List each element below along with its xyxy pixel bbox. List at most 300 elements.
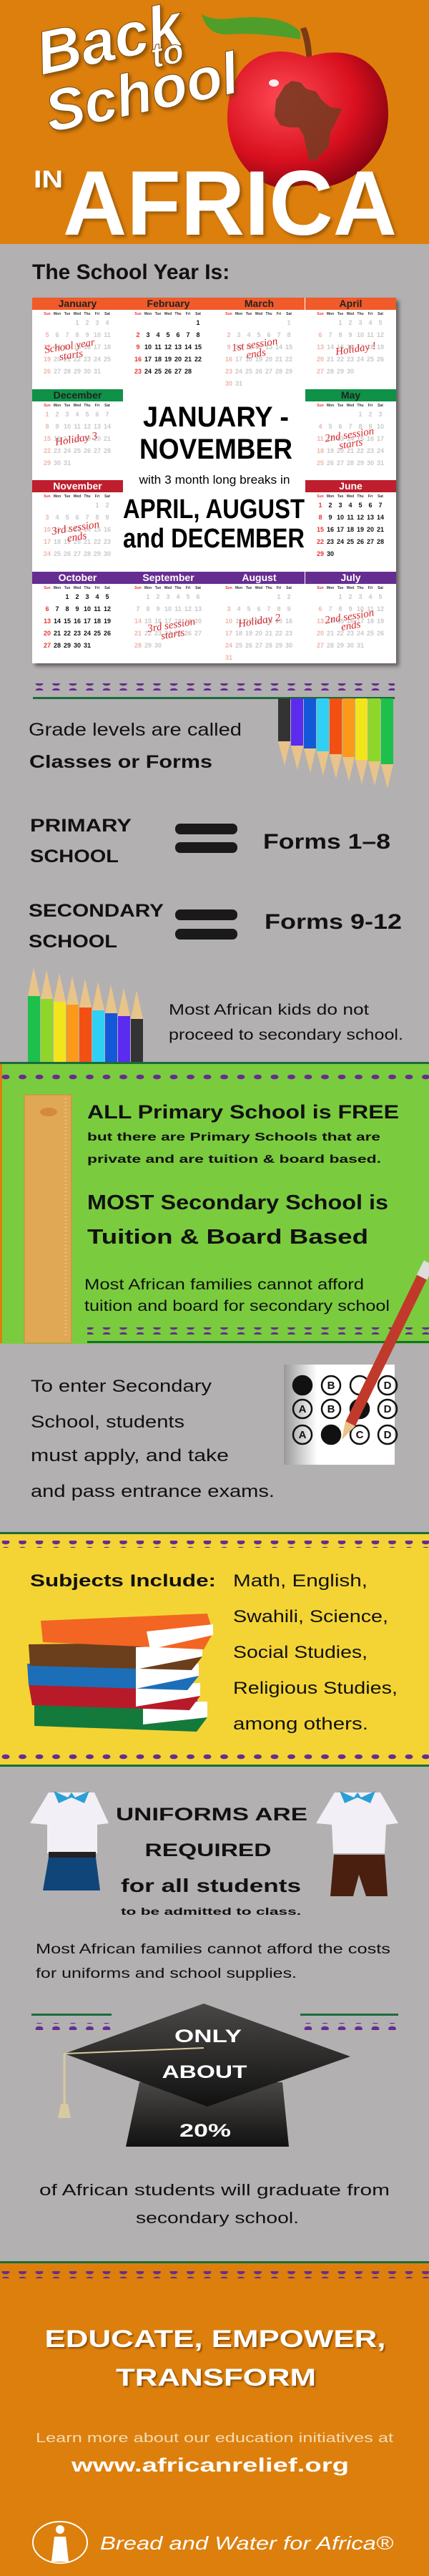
calendar: October: 11 — [94, 605, 101, 613]
calendar: April: 10 — [357, 331, 364, 338]
calendar: September: 12 — [184, 605, 192, 613]
calendar: April: 15 — [337, 343, 344, 351]
calendar: September: 24 — [164, 630, 172, 637]
text: secondary school — [29, 901, 164, 952]
annotation: 3rd session starts: 3rd session — [147, 616, 196, 635]
calendar: October: 13 — [44, 618, 51, 625]
calendar: July — [305, 572, 396, 649]
annotation: 2nd session ends: ends — [340, 619, 362, 633]
calendar: March: 18 — [245, 356, 252, 363]
calendar: July: 20 — [317, 630, 324, 637]
calendar: November: 10 — [44, 526, 51, 533]
calendar: June: 21 — [377, 526, 384, 533]
calendar: June: 27 — [367, 538, 374, 545]
calendar: January: 5 — [45, 331, 49, 338]
calendar: June — [305, 480, 396, 557]
list: subjects: Religious Studies, — [233, 1679, 398, 1698]
title: Back to School: to — [147, 31, 187, 76]
calendar: January: 29 — [74, 368, 81, 375]
calendar: November: 11 — [54, 526, 61, 533]
calendar: August: Fri — [277, 586, 281, 590]
calendar: October — [32, 572, 123, 649]
panel: tuition (green band) — [0, 1062, 429, 1344]
calendar: June: 13 — [367, 514, 374, 521]
calendar: January: Sat — [104, 312, 110, 316]
list: subjects: Math, English, — [233, 1571, 368, 1591]
icon: exam answer sheet: B — [327, 1403, 335, 1415]
calendar: September: 20 — [194, 618, 202, 625]
text: entrance exams: To enter Secondary — [31, 1377, 212, 1396]
calendar: July: 8 — [338, 605, 342, 613]
calendar: December: 3 — [65, 411, 69, 418]
calendar: December — [32, 389, 123, 467]
callout: school year range: JANUARY - — [143, 401, 289, 433]
calendar: February: 11 — [154, 343, 162, 351]
callout: school year range: with 3 month long breaks in — [138, 473, 290, 487]
calendar: September: 25 — [174, 630, 182, 637]
calendar: May: 31 — [377, 459, 384, 467]
calendar: April: 28 — [327, 368, 334, 375]
calendar: August: Thu — [265, 586, 272, 590]
callout: school year range — [123, 401, 305, 554]
calendar: January: 11 — [104, 331, 111, 338]
heading: subjects include: Subjects Include: — [30, 1571, 216, 1591]
calendar: July: 6 — [318, 605, 322, 613]
calendar: July: 25 — [367, 630, 374, 637]
calendar: January: 28 — [64, 368, 71, 375]
calendar: September: 1 — [146, 593, 150, 600]
calendar: November: 22 — [94, 538, 101, 545]
calendar: July: Fri — [368, 586, 373, 590]
title: Back to School — [30, 0, 245, 145]
calendar: January: 12 — [44, 343, 51, 351]
calendar: March: Sun — [225, 312, 232, 316]
calendar: January: 10 — [94, 331, 101, 338]
calendar: September: September — [142, 572, 194, 583]
calendar: April: 9 — [348, 331, 352, 338]
calendar: August: 4 — [237, 605, 240, 613]
calendar: October: 2 — [75, 593, 79, 600]
calendar: January: Mon — [54, 312, 61, 316]
main body graphics — [0, 683, 429, 2576]
calendar: May: Mon — [327, 404, 334, 408]
calendar: June: 17 — [337, 526, 344, 533]
calendar: September: 8 — [146, 605, 150, 613]
calendar: June: 18 — [347, 526, 354, 533]
calendar: March: 22 — [285, 356, 292, 363]
calendar: August: 9 — [287, 605, 290, 613]
calendar: May: 9 — [368, 423, 372, 430]
calendar: December: 14 — [104, 423, 111, 430]
annotation: 3rd session ends: ends — [66, 530, 87, 545]
calendar: July: 17 — [357, 618, 364, 625]
calendar: February: Tue — [155, 312, 161, 316]
calendar: September: Sun — [134, 586, 142, 590]
icon: exam answer sheet: D — [384, 1403, 392, 1415]
calendar: December: 13 — [94, 423, 101, 430]
calendar: January: Tue — [64, 312, 70, 316]
calendar: July: 22 — [337, 630, 344, 637]
calendar: June: 14 — [377, 514, 384, 521]
calendar: May: 27 — [337, 459, 344, 467]
calendar: March: 13 — [265, 343, 272, 351]
calendar: July: 28 — [327, 642, 334, 649]
calendar: June: 29 — [317, 550, 324, 557]
calendar: July: 7 — [328, 605, 332, 613]
calendar: July: Sat — [378, 586, 383, 590]
text: graduation statistic: secondary school. — [136, 2209, 299, 2227]
calendar: April: 29 — [337, 368, 344, 375]
calendar: May: Thu — [357, 404, 364, 408]
calendar: August: 17 — [225, 630, 232, 637]
calendar: July: 10 — [357, 605, 364, 613]
calendar: June: 4 — [348, 502, 352, 509]
calendar: September: 28 — [134, 642, 142, 649]
calendar: June: 20 — [367, 526, 374, 533]
calendar: February: 25 — [154, 368, 162, 375]
calendar: May: 6 — [338, 423, 342, 430]
calendar: April: Sat — [378, 312, 383, 316]
calendar: August: 14 — [265, 618, 272, 625]
annotation: 3rd session starts: starts — [160, 627, 185, 642]
calendar: November: 27 — [74, 550, 81, 557]
calendar: December: 26 — [84, 447, 91, 454]
panel: subjects (yellow band) — [0, 1532, 429, 1767]
icon: exam answer sheet: A — [299, 1429, 307, 1441]
calendar: June: Mon — [327, 494, 334, 499]
text: all primary school is free: but there are Primary Schools that are — [87, 1131, 380, 1143]
calendar: April: 14 — [327, 343, 334, 351]
calendar: December: 29 — [44, 459, 51, 467]
annotation: 1st session ends: 1st session — [231, 336, 278, 354]
calendar: March: 30 — [225, 380, 232, 387]
calendar: January: 17 — [94, 343, 101, 351]
text: families cannot afford tuition: tuition and board for secondary school — [84, 1298, 390, 1314]
calendar: May: 21 — [347, 447, 354, 454]
text: graduation statistic: of African students will graduate from — [39, 2181, 390, 2199]
calendar: February: 7 — [186, 331, 190, 338]
calendar: April: April — [340, 298, 362, 309]
calendar: April — [305, 298, 396, 375]
text: forms 9-12: Forms 9-12 — [265, 910, 402, 934]
calendar: January: 25 — [104, 356, 111, 363]
calendar: November — [32, 480, 123, 557]
icon: exam answer sheet: D — [384, 1380, 392, 1392]
calendar: June: 9 — [328, 514, 332, 521]
calendar: May: 30 — [367, 459, 374, 467]
calendar: November: Fri — [95, 494, 99, 499]
text: all primary school is free: ALL Primary School is FREE — [87, 1101, 399, 1123]
calendar: May: 12 — [327, 435, 334, 442]
calendar: October: 29 — [64, 642, 71, 649]
calendar: April: 22 — [337, 356, 344, 363]
calendar: May: 17 — [377, 435, 384, 442]
calendar: March: 14 — [275, 343, 282, 351]
calendar: May: Tue — [337, 404, 343, 408]
calendar: November: 3 — [45, 514, 49, 521]
calendar: November: 12 — [64, 526, 71, 533]
calendar: September: 18 — [174, 618, 182, 625]
calendar: December: 15 — [44, 435, 51, 442]
list: subjects: among others. — [233, 1714, 368, 1734]
calendar: April: 24 — [357, 356, 364, 363]
list: subjects: Social Studies, — [233, 1643, 368, 1662]
calendar: June: 23 — [327, 538, 334, 545]
calendar: January: 27 — [54, 368, 61, 375]
calendar: August: 6 — [257, 605, 260, 613]
annotation: 2nd session starts: starts — [338, 436, 363, 452]
calendar: December: 5 — [85, 411, 89, 418]
calendar: August: 21 — [265, 630, 272, 637]
calendar: June: 16 — [327, 526, 334, 533]
calendar: May: 8 — [358, 423, 362, 430]
heading: educate empower transform: TRANSFORM — [116, 2364, 316, 2391]
calendar: October: 10 — [84, 605, 91, 613]
calendar: June: Fri — [368, 494, 373, 499]
calendar: January — [32, 298, 123, 375]
calendar: October: 14 — [54, 618, 61, 625]
calendar: March: 6 — [267, 331, 270, 338]
calendar: June: 12 — [357, 514, 364, 521]
calendar: January: 9 — [85, 331, 89, 338]
calendar: December: 11 — [74, 423, 81, 430]
icon: uniform with skirt — [30, 1791, 109, 1890]
calendar: October: Sun — [44, 586, 51, 590]
calendar: September: 16 — [154, 618, 162, 625]
calendar: October: 1 — [65, 593, 69, 600]
calendar: August: 28 — [265, 642, 272, 649]
calendar: March: Fri — [277, 312, 281, 316]
text: all primary school is free: private and are tuition & board based. — [87, 1153, 381, 1166]
calendar: September: Wed — [164, 586, 172, 590]
calendar: May: 3 — [378, 411, 382, 418]
calendar: October: 19 — [104, 618, 111, 625]
calendar: August: 3 — [227, 605, 230, 613]
calendar: April: 21 — [327, 356, 334, 363]
calendar: July: Mon — [327, 586, 334, 590]
calendar: July: 1 — [338, 593, 342, 600]
calendar: April: 5 — [378, 319, 382, 326]
calendar: June: 10 — [337, 514, 344, 521]
callout: school year range: NOVEMBER — [139, 434, 292, 465]
calendar: August: 7 — [267, 605, 270, 613]
calendar: December: 6 — [95, 411, 99, 418]
calendar: March: 9 — [227, 343, 230, 351]
calendar: June: 8 — [318, 514, 322, 521]
calendar: February: 13 — [174, 343, 182, 351]
calendar: March: 11 — [245, 343, 252, 351]
calendar: January: Thu — [84, 312, 91, 316]
calendar: November: 5 — [65, 514, 69, 521]
calendar: March: 28 — [275, 368, 282, 375]
calendar: May: 13 — [337, 435, 344, 442]
calendar: June: 30 — [327, 550, 334, 557]
divider: dots — [33, 683, 395, 691]
text: grade levels — [29, 720, 242, 772]
calendar: February: 26 — [164, 368, 172, 375]
calendar: February: Wed — [164, 312, 172, 316]
text: uniforms required: for all students — [121, 1875, 301, 1896]
icon: exam answer sheet: A — [299, 1403, 307, 1415]
calendar: August: 8 — [277, 605, 280, 613]
calendar: November: 4 — [55, 514, 59, 521]
calendar: November: 18 — [54, 538, 61, 545]
calendar: November: 20 — [74, 538, 81, 545]
calendar: March — [214, 298, 305, 387]
calendar: May: 28 — [347, 459, 354, 467]
calendar: August: August — [242, 572, 277, 583]
text: entrance exams: School, students — [31, 1413, 184, 1432]
calendar: July: 26 — [377, 630, 384, 637]
calendar: May: Wed — [347, 404, 354, 408]
calendar: February: 2 — [136, 331, 140, 338]
icon: exam answer sheet: D — [384, 1429, 392, 1441]
calendar: January: 3 — [95, 319, 99, 326]
calendar: October: 18 — [94, 618, 101, 625]
annotation: school year starts: School year — [44, 337, 96, 356]
calendar: September: 14 — [134, 618, 142, 625]
calendar: January: 24 — [94, 356, 101, 363]
text: most secondary is tuition: Tuition & Board Based — [87, 1226, 368, 1249]
heading: educate empower transform: EDUCATE, EMPOWER, — [44, 2326, 386, 2353]
calendar: October: 24 — [84, 630, 91, 637]
icon: graduation cap with statistic: ABOUT — [162, 2062, 247, 2082]
list: subjects — [233, 1571, 398, 1734]
calendar: April: 8 — [338, 331, 342, 338]
calendar: November: 24 — [44, 550, 51, 557]
calendar: January: 15 — [74, 343, 81, 351]
calendar: May: 7 — [348, 423, 352, 430]
calendar: October: 6 — [45, 605, 49, 613]
calendar: August: 2 — [287, 593, 290, 600]
calendar: June: Sun — [317, 494, 324, 499]
annotation: 1st session ends: ends — [245, 347, 267, 361]
calendar: August: 29 — [275, 642, 282, 649]
calendar: November: 13 — [74, 526, 81, 533]
calendar: January: 20 — [54, 356, 61, 363]
calendar: May: 4 — [318, 423, 322, 430]
calendar: June: 19 — [357, 526, 364, 533]
calendar: February: 22 — [194, 356, 202, 363]
calendar: May: 24 — [377, 447, 384, 454]
annotation: holiday 3: Holiday 3 — [54, 430, 98, 449]
calendar: February: 12 — [164, 343, 172, 351]
calendar: December: 23 — [54, 447, 61, 454]
calendar: November: 29 — [94, 550, 101, 557]
calendar: February: Sat — [195, 312, 201, 316]
calendar: February: Thu — [174, 312, 182, 316]
calendar: May — [305, 389, 396, 467]
calendar: August: 11 — [235, 618, 242, 625]
calendar: September: 9 — [156, 605, 160, 613]
calendar: December: 21 — [104, 435, 111, 442]
calendar: April: 30 — [347, 368, 354, 375]
calendar: April: Mon — [327, 312, 334, 316]
calendar: July: 18 — [367, 618, 374, 625]
calendar: January: 16 — [84, 343, 91, 351]
calendar: June: 26 — [357, 538, 364, 545]
calendar: February: 15 — [194, 343, 202, 351]
calendar: April: 16 — [347, 343, 354, 351]
calendar: August: 18 — [235, 630, 242, 637]
calendar: July: 4 — [368, 593, 372, 600]
calendar: January: 30 — [84, 368, 91, 375]
calendar: August: Wed — [255, 586, 262, 590]
calendar: November: 30 — [104, 550, 111, 557]
calendar: May: Sun — [317, 404, 324, 408]
calendar: December: 4 — [75, 411, 79, 418]
text: primary school: PRIMARY — [30, 816, 132, 836]
icon: graduation cap with statistic: ONLY — [174, 2026, 242, 2046]
calendar: April: 6 — [318, 331, 322, 338]
icon: pencils pointing up — [28, 967, 143, 1063]
calendar: May: 26 — [327, 459, 334, 467]
calendar: June: 2 — [328, 502, 332, 509]
calendar: February: 20 — [174, 356, 182, 363]
calendar: December: Sat — [104, 404, 110, 408]
calendar: July: 13 — [317, 618, 324, 625]
calendar: March: March — [245, 298, 274, 309]
text: families cannot afford tuition — [84, 1277, 390, 1314]
calendar: November: 23 — [104, 538, 111, 545]
icon: uniform with shorts — [316, 1791, 398, 1896]
calendar: April: Wed — [347, 312, 354, 316]
calendar: September: 21 — [134, 630, 142, 637]
calendar: December: 28 — [104, 447, 111, 454]
calendar: July: 21 — [327, 630, 334, 637]
calendar: April: 18 — [367, 343, 374, 351]
calendar: March: 27 — [265, 368, 272, 375]
calendar: November: Thu — [84, 494, 91, 499]
calendar: April: 26 — [377, 356, 384, 363]
logo: Bread and Water for Africa — [33, 2522, 394, 2563]
calendar: November: 25 — [54, 550, 61, 557]
calendar: September: Mon — [144, 586, 152, 590]
calendar: December: 25 — [74, 447, 81, 454]
calendar: December: December — [54, 389, 102, 401]
calendar: August: 23 — [285, 630, 292, 637]
calendar: April: 4 — [368, 319, 372, 326]
calendar: September: Tue — [155, 586, 161, 590]
icon: equals sign primary — [175, 824, 237, 853]
calendar: January: January — [59, 298, 97, 309]
calendar: September: 2 — [156, 593, 160, 600]
calendar: August: 12 — [245, 618, 252, 625]
text: most kids do not proceed: Most African kids do not — [169, 1002, 369, 1018]
calendar: January: Sun — [44, 312, 51, 316]
list: subjects: Swahili, Science, — [233, 1607, 388, 1626]
calendar: December: 8 — [45, 423, 49, 430]
calendar: March: Tue — [246, 312, 252, 316]
icon: stack of books — [27, 1614, 213, 1732]
calendar: May: 2 — [368, 411, 372, 418]
calendar: October: 4 — [95, 593, 99, 600]
calendar: September: 23 — [154, 630, 162, 637]
calendar: June: 25 — [347, 538, 354, 545]
calendar: October: 15 — [64, 618, 71, 625]
calendar: July: 29 — [337, 642, 344, 649]
calendar: August: 5 — [247, 605, 250, 613]
calendar: July: 11 — [367, 605, 374, 613]
calendar: February: 21 — [184, 356, 192, 363]
calendar: July: 24 — [357, 630, 364, 637]
annotation: 2nd session ends: 2nd session — [324, 608, 375, 626]
calendar: March: 19 — [255, 356, 262, 363]
calendar: April: 19 — [377, 343, 384, 351]
calendar: September: 27 — [194, 630, 202, 637]
icon: equals sign secondary — [175, 909, 237, 940]
calendar: November: Sat — [104, 494, 110, 499]
